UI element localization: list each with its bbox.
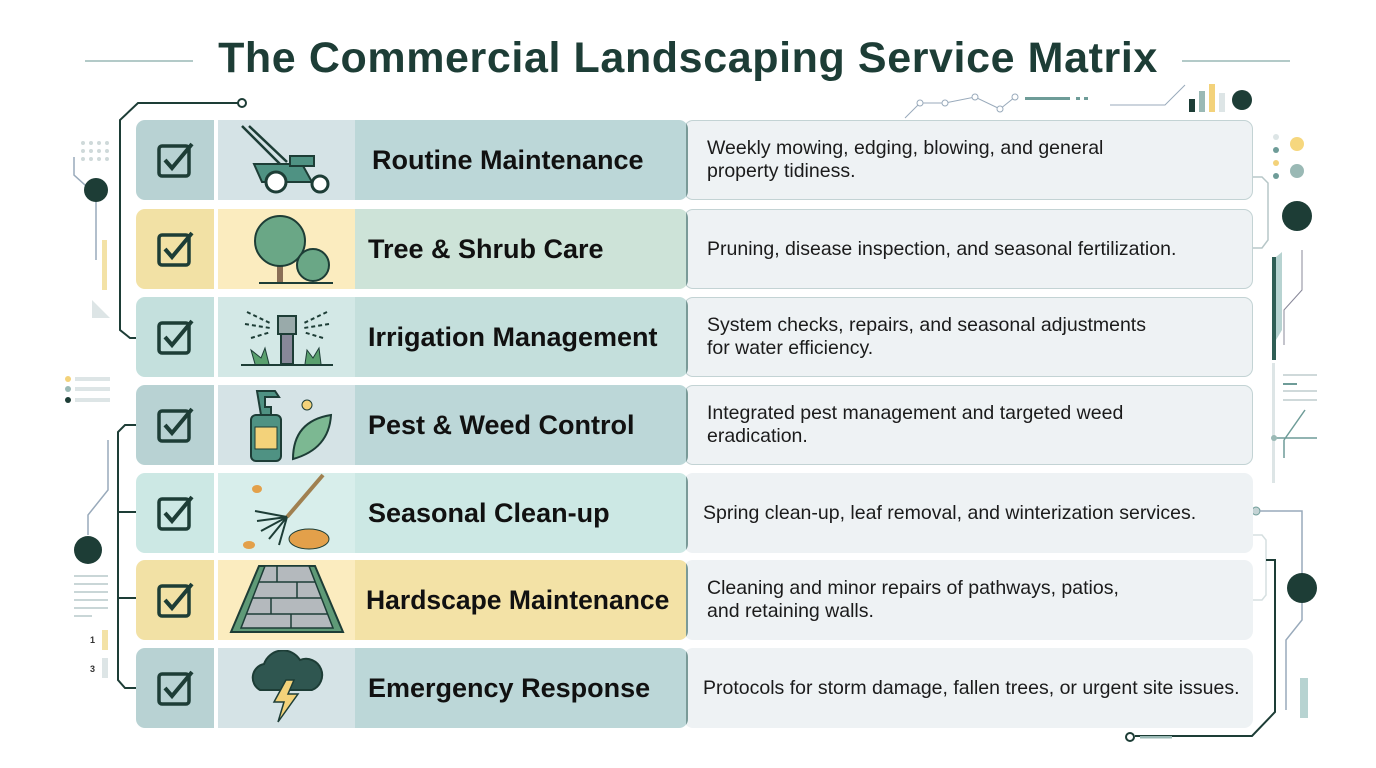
title	[355, 120, 688, 200]
icon: paved path	[218, 560, 355, 640]
row: Pest & Weed Control	[136, 385, 1253, 465]
title: Emergency Response	[368, 672, 650, 702]
title	[355, 648, 688, 728]
row: Tree & Shrub Care	[136, 209, 1253, 289]
description: for water efficiency.	[707, 337, 873, 359]
row: Routine Maintenance	[136, 120, 1253, 200]
title	[355, 473, 688, 553]
title	[355, 297, 688, 377]
description	[684, 560, 1253, 640]
row: Seasonal Clean-up	[136, 473, 1253, 553]
icon: storm cloud	[218, 648, 355, 728]
checkbox	[136, 297, 218, 377]
description: Cleaning and minor repairs of pathways, patios,	[707, 577, 1119, 599]
title: The Commercial Landscaping Service Matrix	[218, 34, 1158, 82]
icon: rake and leaves	[218, 473, 355, 553]
icon: trees	[218, 209, 355, 289]
row: Irrigation Management	[136, 297, 1253, 377]
row: Emergency Response	[136, 648, 1253, 728]
title	[355, 560, 688, 640]
description	[684, 297, 1253, 377]
title: Irrigation Management	[368, 322, 658, 352]
description	[684, 473, 1253, 553]
row: Hardscape Maintenance	[136, 560, 1253, 640]
description: System checks, repairs, and seasonal adjustments	[707, 314, 1146, 336]
description	[684, 209, 1253, 289]
description: Pruning, disease inspection, and seasonal fertilization.	[707, 238, 1176, 260]
icon: spray bottle and leaf	[218, 385, 355, 465]
checkbox	[136, 120, 218, 200]
checkbox	[136, 385, 218, 465]
description: eradication.	[707, 425, 808, 447]
description	[684, 648, 1253, 728]
description: Protocols for storm damage, fallen trees, or urgent site issues.	[703, 676, 1240, 698]
checkbox	[136, 560, 218, 640]
description: Integrated pest management and targeted weed	[707, 402, 1123, 424]
icon: lawn mower	[218, 120, 355, 200]
title	[355, 209, 688, 289]
checkbox	[136, 473, 218, 553]
description: property tidiness.	[707, 160, 856, 182]
checkbox	[136, 209, 218, 289]
icon: sprinkler	[218, 297, 355, 377]
title: Seasonal Clean-up	[368, 498, 610, 528]
description: and retaining walls.	[707, 600, 874, 622]
description	[684, 120, 1253, 200]
description	[684, 385, 1253, 465]
title: Pest & Weed Control	[368, 410, 635, 440]
title: Hardscape Maintenance	[366, 584, 669, 614]
description: Spring clean-up, leaf removal, and winterization services.	[703, 502, 1196, 524]
description: Weekly mowing, edging, blowing, and general	[707, 137, 1103, 159]
title: Routine Maintenance	[372, 144, 644, 174]
title	[355, 385, 688, 465]
title: Tree & Shrub Care	[368, 234, 604, 264]
checkbox	[136, 648, 218, 728]
decorative lines and icons: 3	[90, 664, 95, 674]
decorative lines and icons: 1	[90, 635, 95, 645]
